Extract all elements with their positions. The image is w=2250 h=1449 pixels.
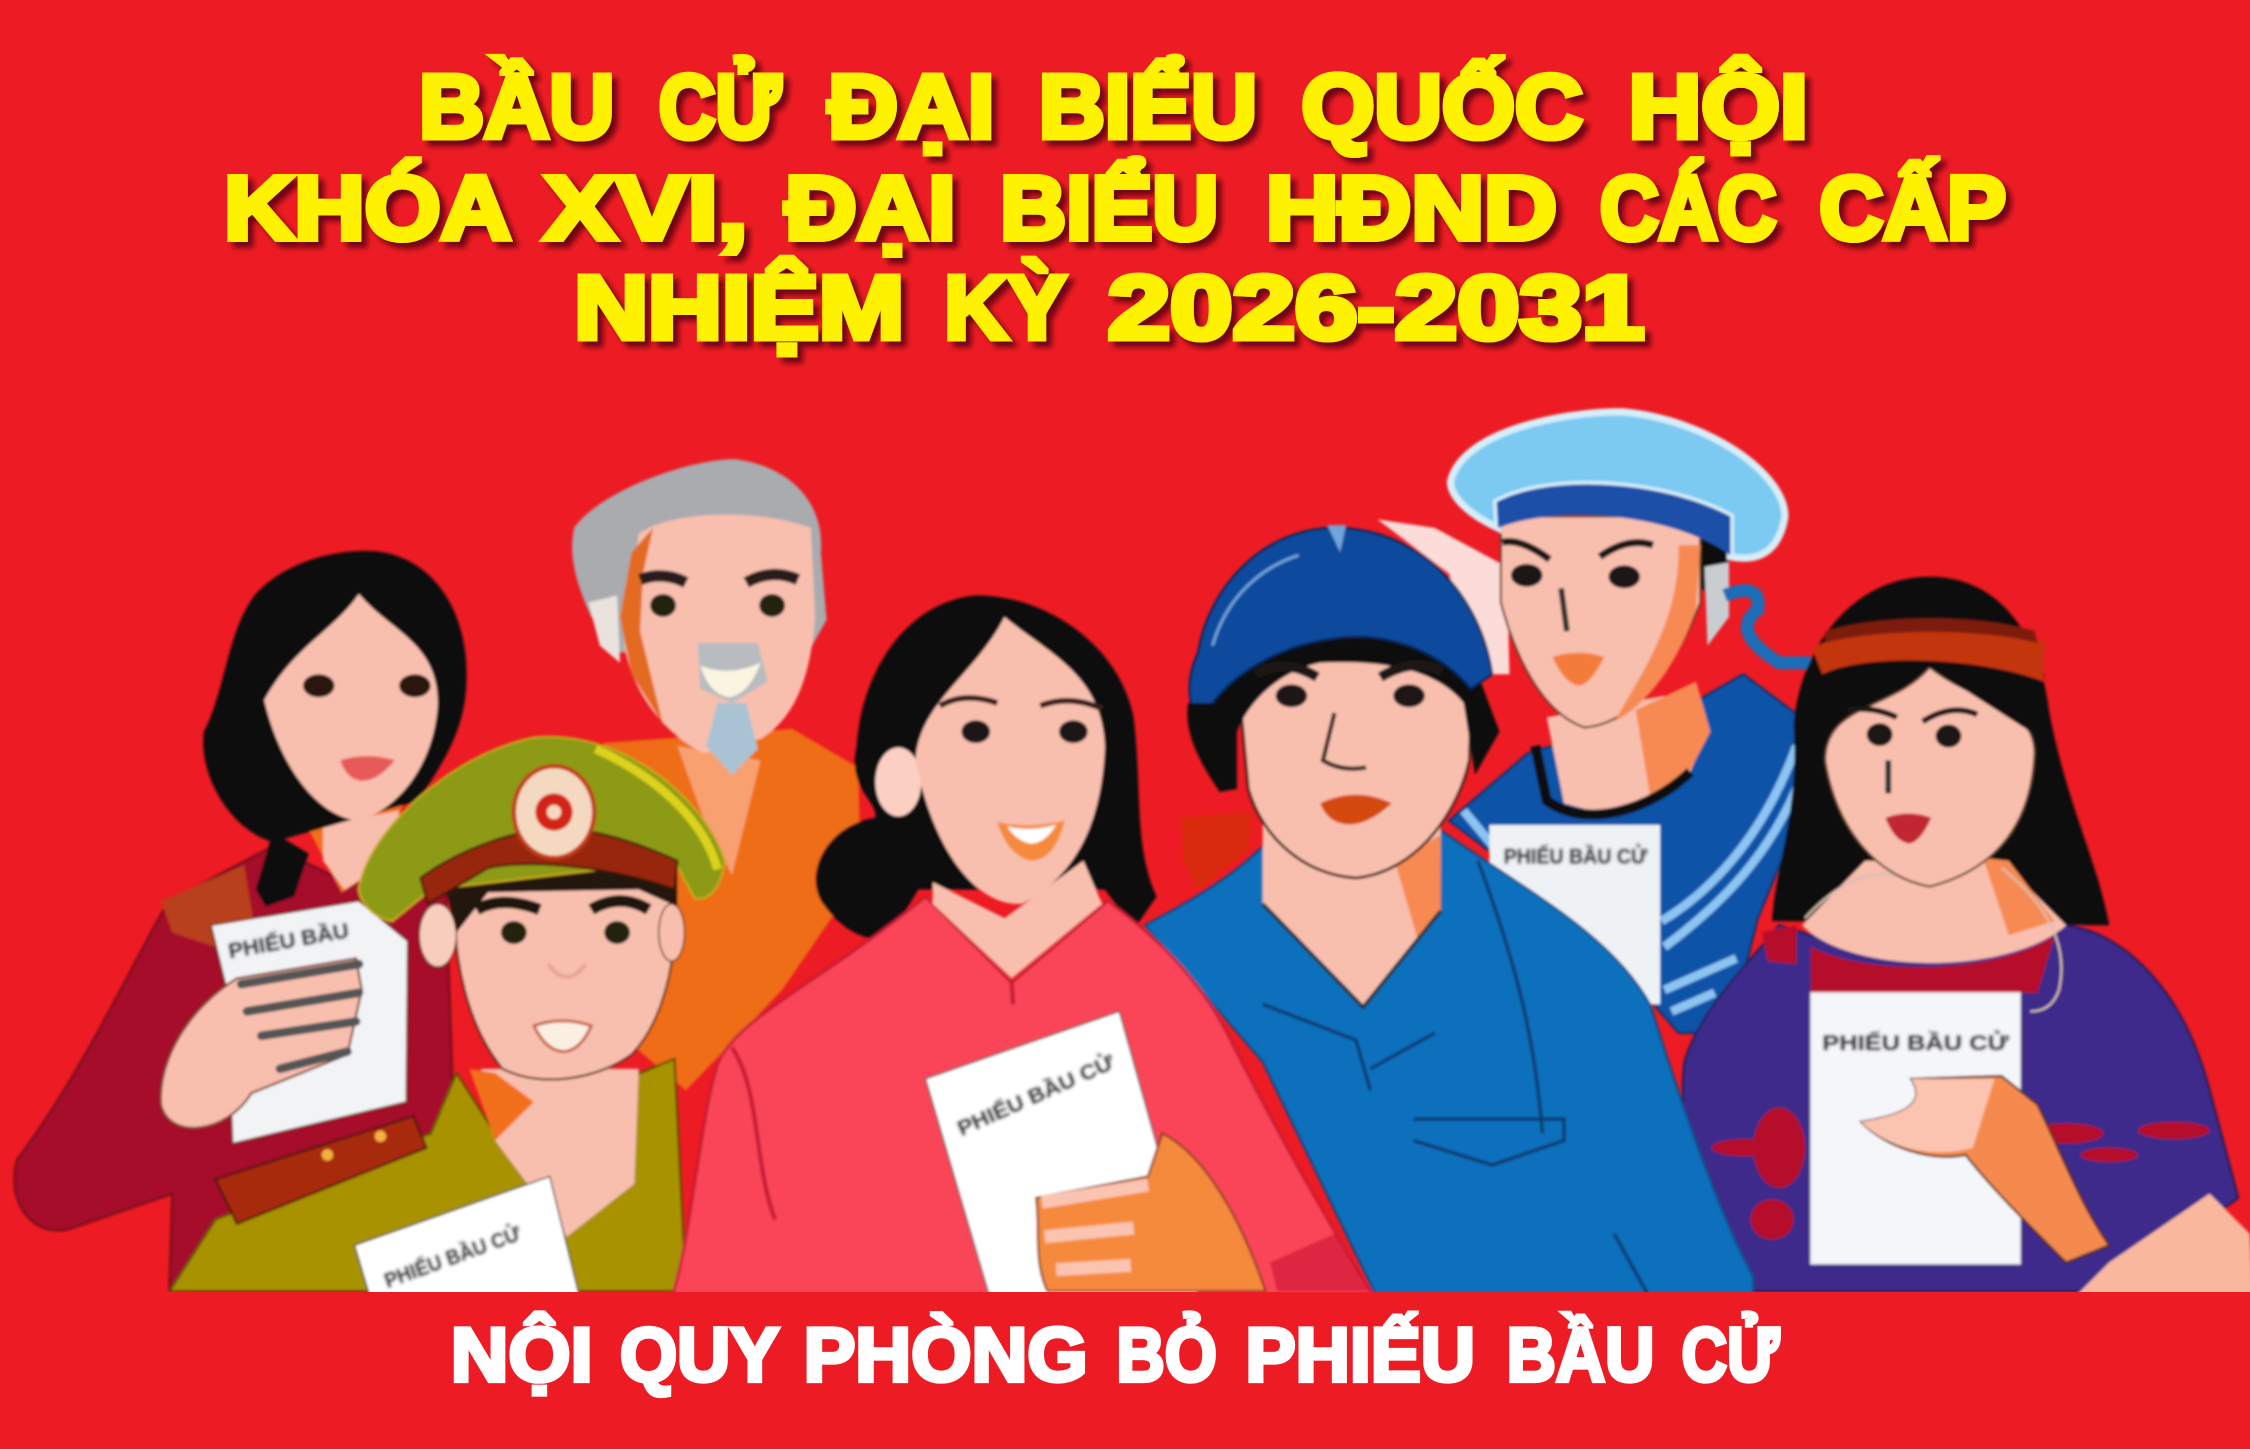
title	[224, 56, 2006, 359]
subtitle: polling room rules: NỘI	[451, 1313, 593, 1398]
subtitle: polling room rules: PHÒNG	[804, 1313, 1088, 1398]
title line 2: HĐND	[1266, 158, 1557, 259]
title line 1: QUỐC	[1301, 56, 1583, 158]
ballot paper: PHIẾU BẦU	[226, 917, 351, 963]
title line 1: CỬ	[659, 56, 781, 158]
title line 1: HỘI	[1629, 56, 1808, 158]
title line 3: KỲ	[944, 258, 1066, 359]
red scarf behind shoulder	[1181, 812, 1251, 889]
title line 1	[419, 56, 1808, 158]
white scarf behind helmet	[1377, 519, 1509, 674]
title line 2: CÁC	[1600, 158, 1776, 259]
ballot paper: PHIẾU BẦU CỬ	[381, 1220, 524, 1293]
ballot paper	[1489, 825, 1660, 1004]
subtitle: polling room rules: BỎ	[1116, 1313, 1217, 1398]
subtitle: polling room rules: CỬ	[1682, 1313, 1780, 1398]
helmet	[1187, 525, 1492, 792]
ballot paper	[211, 901, 408, 1143]
hand and forearm	[1861, 1076, 2250, 1298]
title line 3: NHIỆM	[574, 257, 904, 359]
title line 1: BẦU	[419, 56, 614, 158]
title line 2: XVI,	[544, 158, 748, 259]
title line 3: 2026-2031	[1108, 258, 1644, 359]
figure: sailor	[1377, 412, 1811, 1033]
ballot paper	[926, 1011, 1200, 1298]
figure: old man with grey hair	[572, 459, 861, 1090]
sailor hat	[1451, 412, 1785, 558]
subtitle: polling room rules	[451, 1313, 1780, 1398]
red pattern on blouse	[1712, 1108, 2210, 1240]
title line 2: KHÓA	[224, 158, 511, 259]
figure: woman in pink, centre	[672, 595, 1375, 1298]
title line 2: ĐẠI	[785, 158, 956, 259]
title line 1: ĐẠI	[828, 57, 994, 158]
subtitle: polling room rules: PHIẾU	[1246, 1313, 1475, 1398]
red shoulder strap	[215, 1116, 426, 1224]
ballot paper: PHIẾU BẦU CỬ	[953, 1049, 1118, 1141]
hand	[1036, 1133, 1266, 1291]
title line 2: CẤP	[1819, 157, 2006, 259]
title line 3	[574, 257, 1644, 359]
ballot paper	[1811, 993, 2020, 1264]
figure: woman in purple, right	[1683, 577, 2250, 1298]
illustration: group of voters	[14, 412, 2250, 1298]
title line 1: BIỂU	[1039, 56, 1257, 158]
figure: woman in dark red, left	[14, 551, 467, 1291]
ballot paper	[355, 1176, 580, 1298]
subtitle: polling room rules: QUY	[620, 1313, 779, 1398]
title line 2: BIỂU	[1000, 157, 1218, 259]
ribbon	[1725, 591, 1811, 663]
police cap	[359, 737, 725, 921]
figure: worker in blue	[1145, 525, 1753, 1298]
ballot paper: PHIẾU BẦU CỬ	[1504, 844, 1647, 869]
subtitle: polling room rules: BẦU	[1507, 1313, 1654, 1398]
ballot paper: PHIẾU BẦU CỬ	[1822, 1030, 2009, 1055]
title line 2	[224, 157, 2006, 259]
figure: police officer	[170, 737, 725, 1298]
hand holding ballot	[161, 958, 362, 1128]
